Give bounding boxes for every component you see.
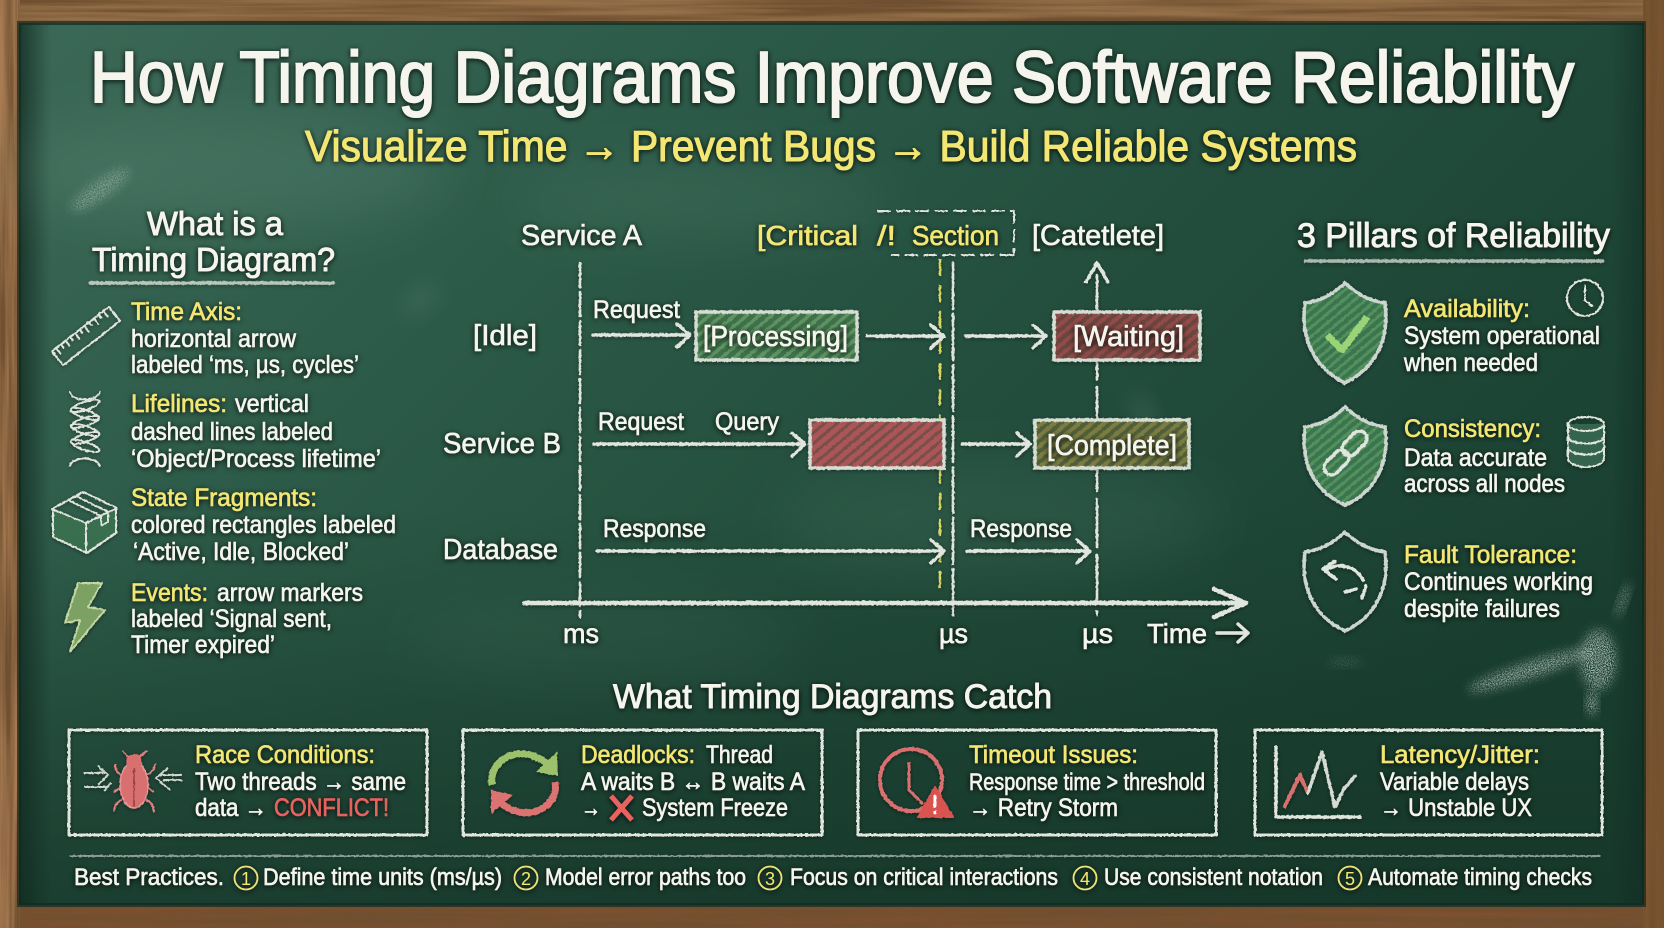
panel: 3 pillars of reliability — [1297, 217, 1610, 631]
diagram labels: Service A — [521, 220, 643, 252]
text: deadlocks: System Freeze — [642, 794, 788, 822]
item: lifelines: ‘Object/Process lifetime’ — [131, 445, 381, 473]
item: lifelines: vertical — [235, 390, 309, 418]
icon: shield chain — [1304, 407, 1386, 505]
item: events: Events: — [131, 579, 208, 607]
diagram labels: Request — [598, 408, 684, 436]
panel: what is a timing diagram — [92, 205, 396, 659]
title: How Timing Diagrams Improve Software Reliability — [90, 38, 1574, 118]
diagram labels: [Waiting] — [1073, 321, 1184, 353]
text: race conditions: Two threads → same — [195, 768, 406, 796]
diagram labels: [Processing] — [703, 321, 848, 353]
diagram labels: Response — [970, 515, 1072, 543]
state: complete — [1035, 420, 1189, 468]
icon: shield recovery — [1304, 532, 1386, 631]
icon: bug — [84, 751, 182, 812]
diagram labels: [Critical — [757, 220, 858, 251]
pillars text: when needed — [1403, 349, 1538, 377]
item: lifelines — [131, 390, 381, 473]
lifelines — [580, 260, 1108, 617]
diagram labels: [Catetlete] — [1032, 220, 1164, 252]
best practices strip: 2 — [521, 869, 531, 889]
catch box text — [195, 741, 1540, 822]
text: race conditions — [195, 741, 406, 822]
state: blocked red block — [810, 420, 944, 468]
diagram labels: µs — [1082, 618, 1113, 649]
box outlines — [69, 730, 1602, 856]
best practices strip — [74, 864, 1592, 891]
panel: catch boxes — [69, 730, 1602, 856]
text: race conditions: data → — [195, 794, 267, 822]
best practices strip: 4 — [1080, 869, 1090, 889]
item: time axis: labeled ‘ms, µs, cycles’ — [131, 351, 359, 379]
icon: ruler — [52, 307, 120, 365]
pillars text: across all nodes — [1404, 470, 1565, 498]
diagram labels: Section — [912, 220, 999, 251]
diagram labels: [Complete] — [1047, 430, 1177, 462]
state: waiting — [1054, 312, 1200, 360]
diagram labels: [Idle] — [473, 320, 537, 352]
text: deadlocks: Deadlocks: — [581, 741, 695, 769]
text: race conditions: CONFLICT! — [274, 794, 389, 822]
best practices strip: Focus on critical interactions — [790, 864, 1058, 891]
diagram labels: /! — [877, 220, 896, 251]
icon: jitter chart — [1276, 747, 1360, 817]
state: processing — [696, 312, 857, 360]
best practices strip: Use consistent notation — [1104, 864, 1323, 891]
text: deadlocks — [581, 741, 805, 822]
text: timeout issues: → Retry Storm — [969, 794, 1118, 822]
diagram labels: µs — [939, 618, 968, 649]
icon: clock — [1567, 280, 1603, 316]
text: latency jitter: Variable delays — [1380, 768, 1529, 796]
item: state fragments: colored rectangles labeled — [131, 511, 396, 539]
best practices strip: 5 — [1345, 869, 1355, 889]
subtitle: Visualize Time → Prevent Bugs → Build Reliable Systems — [305, 122, 1357, 171]
item: state fragments: State Fragments: — [131, 484, 317, 512]
pillars text: Continues working — [1404, 568, 1593, 596]
diagram labels: Database — [443, 534, 558, 566]
diagram labels: Request — [593, 296, 680, 324]
heading: what is a timing diagram: What is a — [147, 205, 284, 242]
diagram labels: Query — [715, 408, 779, 436]
pillars text: Availability: — [1404, 295, 1530, 323]
diagram labels — [443, 220, 1207, 649]
pillars text: Fault Tolerance: — [1404, 541, 1577, 569]
icon: box — [52, 492, 117, 553]
text: timeout issues: Timeout Issues: — [969, 741, 1138, 769]
item: lifelines: Lifelines: — [131, 390, 227, 418]
pillars text: System operational — [1404, 322, 1600, 350]
best practices strip: Best Practices. — [74, 864, 224, 891]
text: latency jitter: Latency/Jitter: — [1380, 741, 1540, 769]
item: state fragments — [131, 484, 396, 566]
text: race conditions: Race Conditions: — [195, 741, 375, 769]
pillars text: 3 Pillars of Reliability — [1297, 217, 1610, 255]
pillars text: despite failures — [1404, 595, 1560, 623]
text: timeout issues — [969, 741, 1205, 822]
text: timeout issues: Response time > threshold — [969, 769, 1205, 796]
text: deadlocks: A waits B ↔ B waits A — [581, 768, 805, 796]
item: events: arrow markers — [217, 579, 363, 607]
message arrows — [593, 324, 1090, 563]
diagram labels: Time — [1147, 618, 1207, 649]
item: time axis: Time Axis: — [131, 298, 242, 326]
heading: what is a timing diagram — [92, 205, 335, 278]
time axis arrow — [524, 589, 1246, 617]
best practices strip: 1 — [241, 869, 251, 889]
item: events: labeled ‘Signal sent, — [131, 605, 332, 633]
icon: shield check — [1304, 283, 1386, 383]
item: time axis: horizontal arrow — [131, 325, 297, 353]
pillars text: Consistency: — [1404, 415, 1541, 443]
diagram labels: ms — [563, 618, 599, 649]
heading: what is a timing diagram: Timing Diagram? — [92, 241, 335, 278]
left panel underline and icons — [52, 283, 333, 652]
best practices strip: 3 — [765, 869, 775, 889]
heading: what timing diagrams catch: What Timing Diagrams Catch — [613, 678, 1052, 716]
text: latency jitter — [1380, 741, 1540, 822]
icon: deadlock cycle arrows — [491, 752, 558, 814]
text: latency jitter: → Unstable UX — [1380, 794, 1532, 822]
text: deadlocks: → — [581, 794, 601, 822]
item: state fragments: ‘Active, Idle, Blocked’ — [133, 538, 349, 566]
pillars text — [1297, 217, 1610, 623]
diagram labels: Service B — [443, 428, 561, 460]
state boxes — [696, 312, 1200, 468]
best practices strip: Define time units (ms/µs) — [263, 864, 502, 891]
item: lifelines: dashed lines labeled — [131, 418, 333, 446]
timing diagram — [443, 211, 1248, 649]
item: events — [131, 579, 363, 659]
diagram labels: Response — [603, 515, 706, 543]
icon: lightning bolt — [65, 583, 105, 652]
item: time axis — [131, 298, 359, 379]
icon: helix lifelines — [69, 392, 101, 466]
icon: timeout clock with warning — [880, 749, 953, 817]
icon: database — [1568, 417, 1604, 467]
critical section dashed box — [878, 211, 1014, 255]
pillars text: Data accurate — [1404, 444, 1547, 472]
best practices strip: Model error paths too — [545, 864, 746, 891]
pillars icons — [1304, 261, 1604, 631]
text: deadlocks: Thread — [706, 741, 773, 769]
item: events: Timer expired’ — [131, 631, 275, 659]
best practices strip: Automate timing checks — [1368, 864, 1592, 891]
arrow: time label — [1217, 624, 1248, 642]
